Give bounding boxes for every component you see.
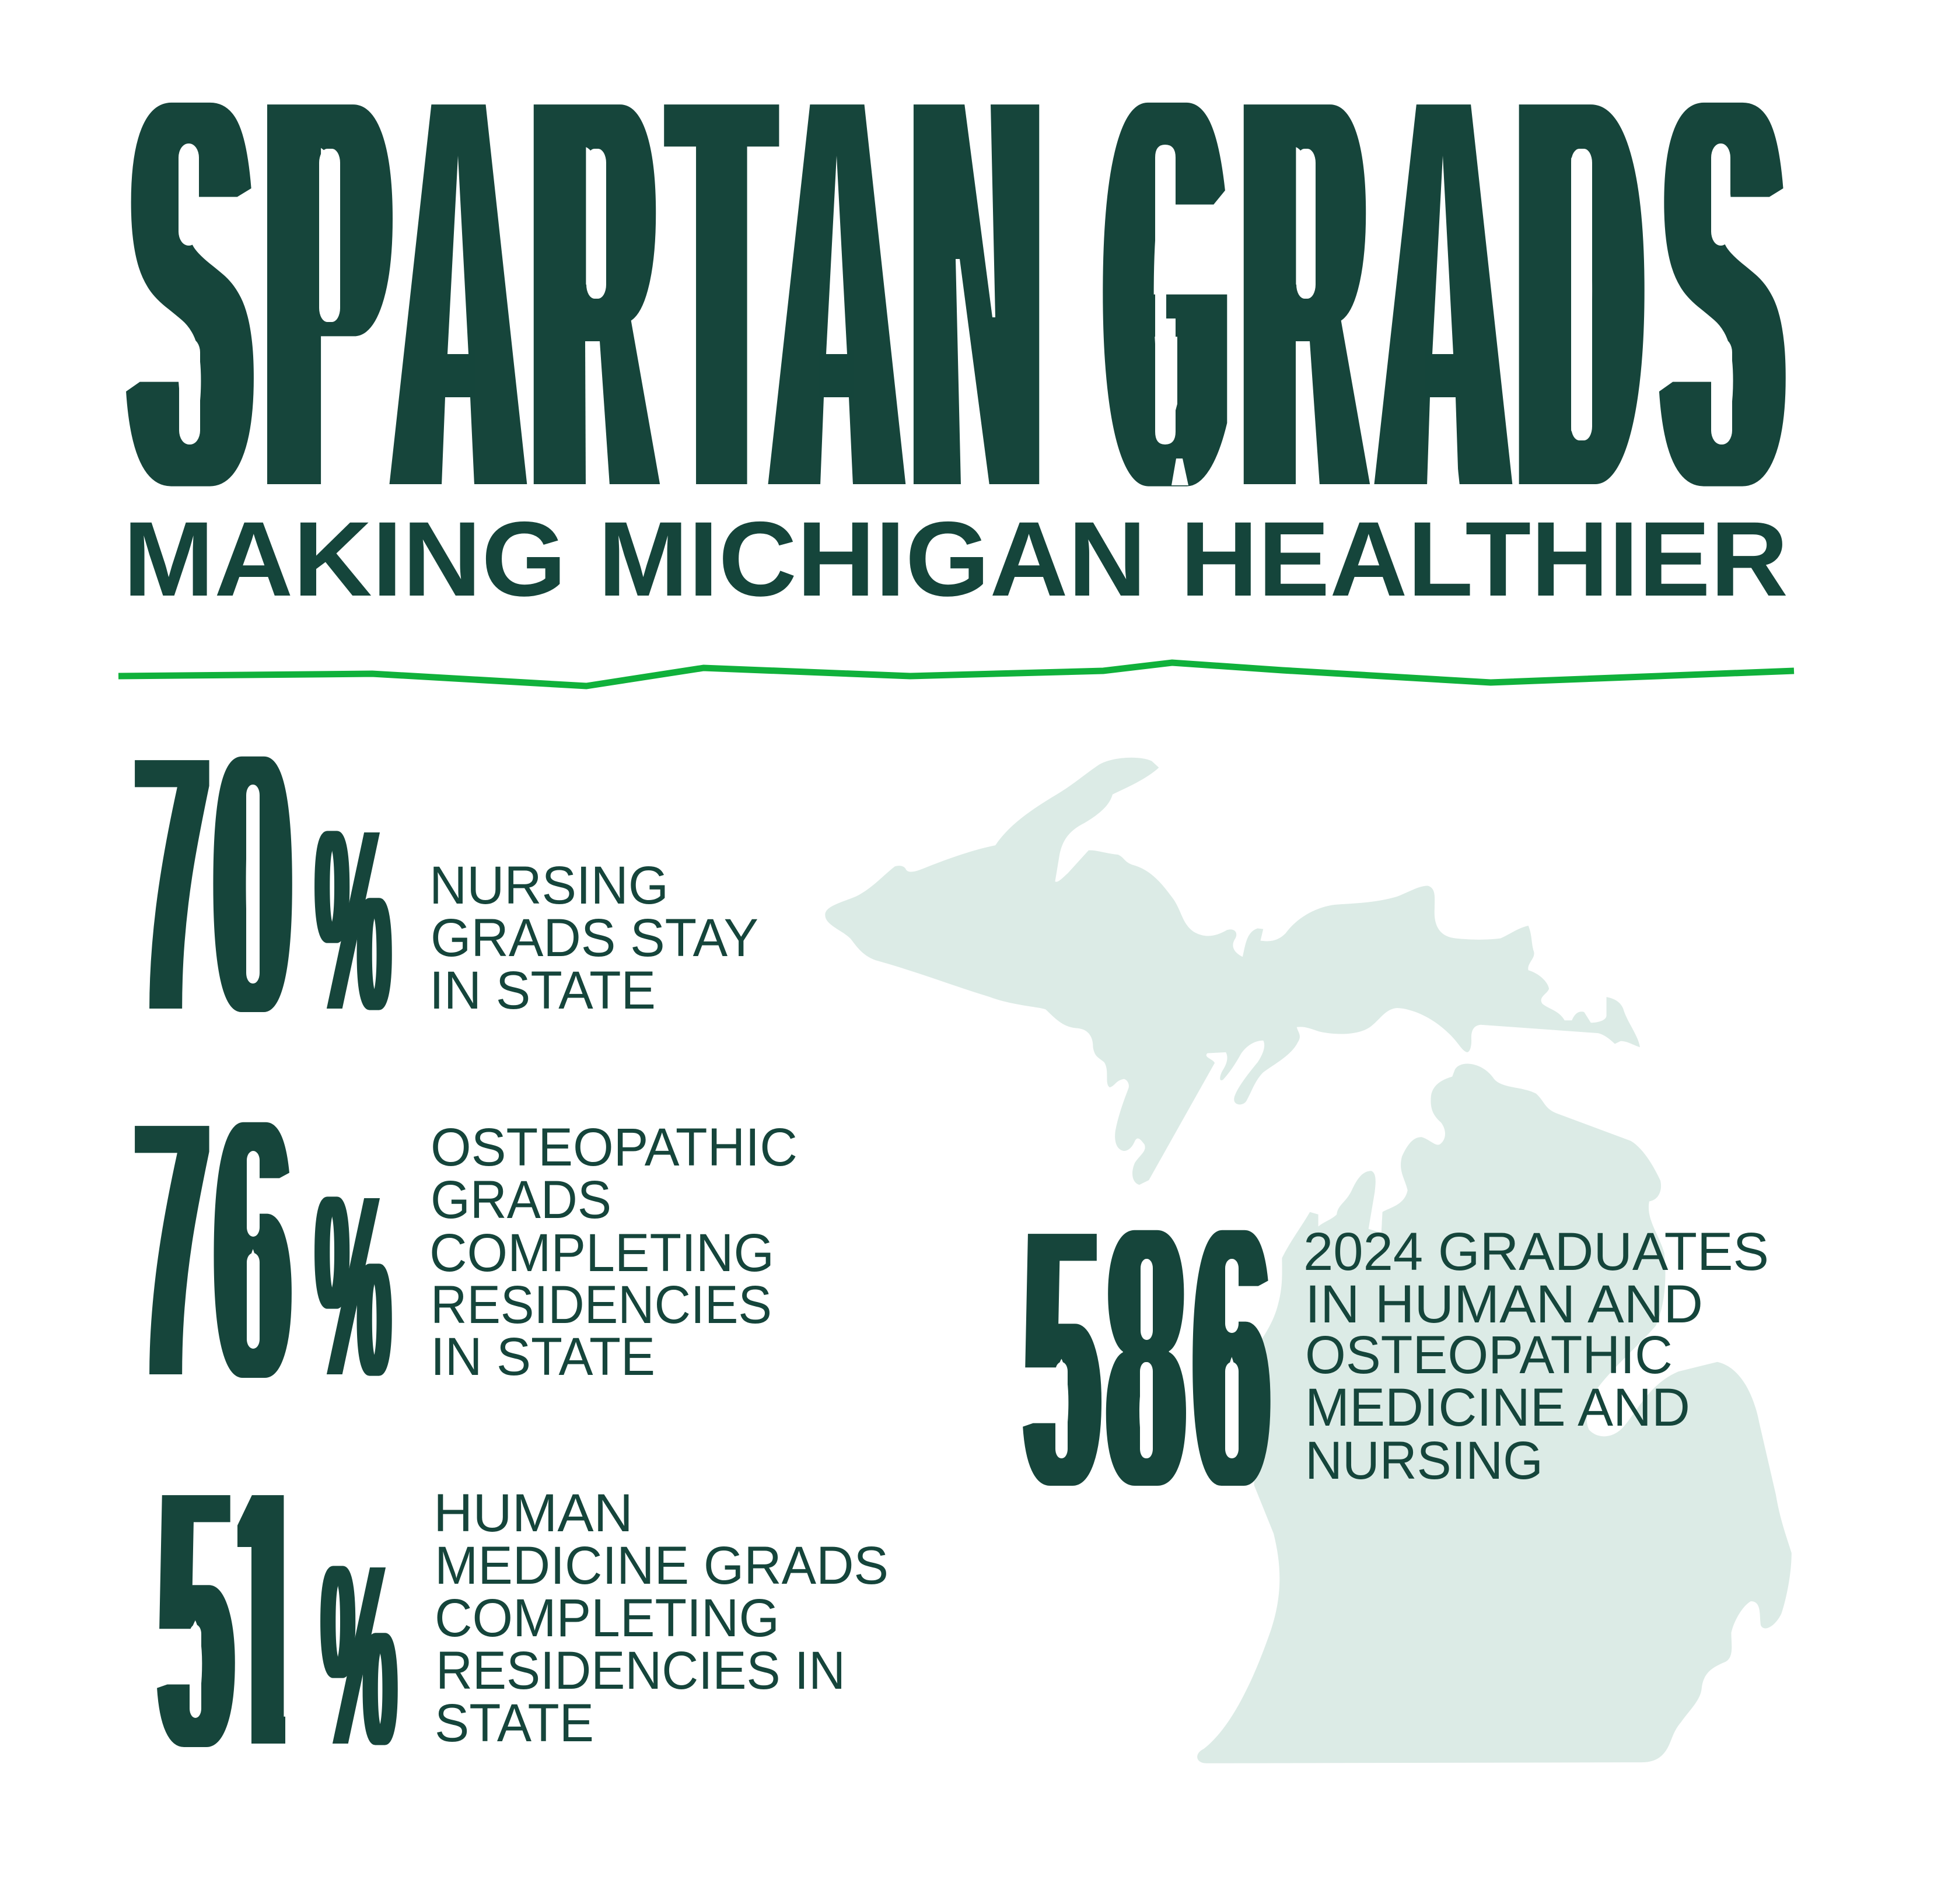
- number: 51 percent: 5: [163, 1416, 229, 1821]
- number: 70 percent: 0: [219, 682, 286, 1086]
- title: T: [680, 0, 763, 601]
- text: nursing grads stay in state: IN STATE: [429, 961, 656, 1020]
- number: 76 percent: 6: [219, 1047, 286, 1451]
- text: human medicine grads completing residencies in state: STATE: [435, 1693, 594, 1753]
- text: human medicine grads completing residencies in state: HUMAN: [433, 1483, 633, 1543]
- number: 70 percent: 7: [140, 682, 204, 1086]
- text: nursing grads stay in state: [429, 856, 758, 1020]
- number: 76 percent: [140, 1047, 390, 1451]
- number: 76 percent: %: [316, 1144, 390, 1429]
- title: A: [1393, 0, 1494, 601]
- text: 2024 graduates in human and osteopathic medicine and nursing: MEDICINE AND: [1305, 1378, 1690, 1437]
- text: 2024 graduates in human and osteopathic medicine and nursing: NURSING: [1305, 1431, 1543, 1490]
- subtitle: MAKING: [123, 499, 566, 618]
- text: human medicine grads completing residencies in state: COMPLETING: [435, 1588, 779, 1648]
- title: G: [1115, 0, 1218, 596]
- text: 2024 graduates in human and osteopathic medicine and nursing: [1303, 1222, 1769, 1490]
- text: 2024 graduates in human and osteopathic medicine and nursing: OSTEOPATHIC: [1305, 1325, 1673, 1385]
- text: osteopathic grads completing residencies in state: GRADS: [431, 1170, 611, 1230]
- text: osteopathic grads completing residencies in state: COMPLETING: [429, 1223, 774, 1283]
- title: S: [138, 0, 242, 596]
- text: human medicine grads completing residencies in state: RESIDENCIES IN: [436, 1641, 845, 1700]
- subtitle: MICHIGAN: [598, 499, 1146, 618]
- stat: 51 percent human medicine: [163, 1416, 889, 1821]
- text: 2024 graduates in human and osteopathic medicine and nursing: IN HUMAN AND: [1305, 1275, 1703, 1334]
- map: upper peninsula: [825, 758, 1640, 1185]
- stat: 76 percent osteopathic: [140, 1047, 798, 1451]
- text: osteopathic grads completing residencies in state: RESIDENCIES: [431, 1275, 772, 1335]
- number: 586: [1029, 1155, 1265, 1559]
- text: nursing grads stay in state: GRADS STAY: [431, 908, 758, 968]
- map of Michigan: [825, 758, 1792, 1763]
- title: A: [787, 0, 887, 601]
- text: osteopathic grads completing residencies in state: [429, 1118, 798, 1387]
- number: 586: 8: [1112, 1156, 1180, 1559]
- title: [138, 0, 1774, 601]
- title: R: [541, 0, 648, 601]
- text: human medicine grads completing residencies in state: MEDICINE GRADS: [435, 1536, 889, 1595]
- green divider line: [118, 663, 1794, 686]
- number: 586: 5: [1029, 1156, 1096, 1559]
- number: 586: 6: [1198, 1155, 1265, 1559]
- text: 2024 graduates in human and osteopathic medicine and nursing: 2024 GRADUATES: [1303, 1222, 1769, 1282]
- number: 51 percent: %: [322, 1513, 396, 1798]
- text: human medicine grads completing residencies in state: [433, 1483, 889, 1753]
- map: lower peninsula: [1197, 1063, 1792, 1763]
- stat: 586 graduates: [1029, 1155, 1769, 1559]
- number: 51 percent: 1: [232, 1417, 299, 1821]
- text: osteopathic grads completing residencies in state: IN STATE: [431, 1327, 655, 1387]
- number: 70 percent: %: [316, 778, 390, 1063]
- text: osteopathic grads completing residencies in state: OSTEOPATHIC: [431, 1118, 798, 1177]
- stat: 70 percent nursing: [140, 682, 758, 1086]
- text: nursing grads stay in state: NURSING: [429, 856, 669, 915]
- title: S: [1671, 0, 1774, 596]
- title: R: [1251, 0, 1358, 601]
- subtitle: [123, 499, 1788, 618]
- number: 51 percent: [163, 1416, 396, 1821]
- title: D: [1526, 0, 1632, 601]
- title: P: [273, 0, 382, 601]
- subtitle: HEALTHIER: [1180, 499, 1788, 618]
- number: 70 percent: [140, 682, 390, 1086]
- title: A: [408, 0, 509, 601]
- title: N: [920, 0, 1033, 601]
- number: 76 percent: 7: [140, 1048, 204, 1451]
